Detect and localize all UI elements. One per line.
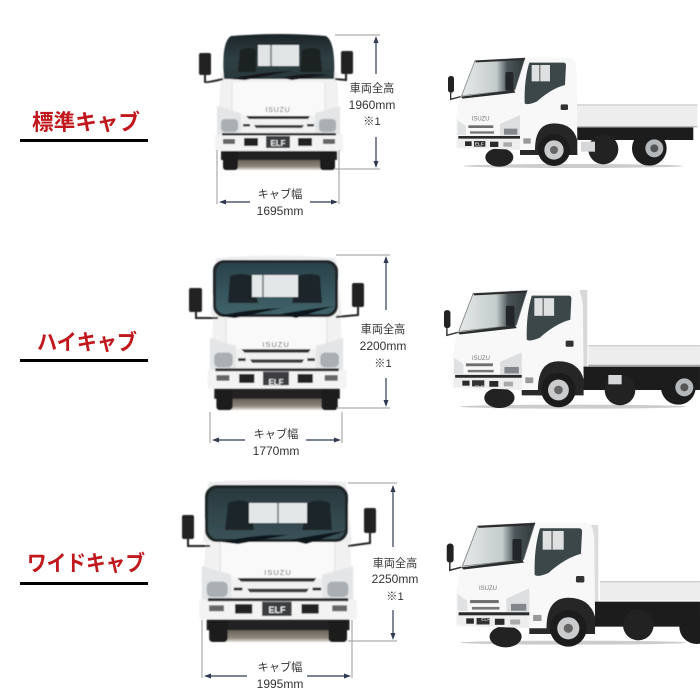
heading: high cab: ハイキャブ bbox=[37, 330, 137, 355]
width dimension: wide cab: 1995mm bbox=[257, 677, 303, 691]
front view truck: wide cab: ISUZU bbox=[264, 568, 292, 577]
height dimension: standard cab bbox=[335, 35, 395, 169]
front view truck: high cab bbox=[189, 256, 364, 410]
height dimension: wide cab: ※1 bbox=[386, 591, 404, 603]
width dimension: standard cab: 1695mm bbox=[257, 204, 303, 218]
height dimension: wide cab: 車両全高 bbox=[373, 556, 417, 570]
width dimension: high cab: 1770mm bbox=[253, 444, 299, 458]
width dimension: standard cab: キャブ幅 bbox=[258, 187, 302, 201]
front view truck: high cab: ELF bbox=[268, 378, 284, 387]
heading: wide cab: ワイドキャブ bbox=[27, 551, 145, 576]
front view truck: standard cab: ISUZU bbox=[266, 107, 290, 114]
height dimension: high cab: 車両全高 bbox=[361, 322, 405, 336]
side view truck: wide cab bbox=[447, 523, 700, 647]
width dimension: wide cab: キャブ幅 bbox=[258, 660, 302, 674]
height dimension: high cab: 2200mm bbox=[360, 339, 406, 353]
heading: standard cab bbox=[20, 110, 148, 142]
side view truck: high cab: ISUZU bbox=[472, 356, 490, 362]
front view truck: standard cab: ELF bbox=[270, 139, 286, 148]
side view truck: standard cab: ISUZU bbox=[472, 116, 490, 122]
side view truck: standard cab bbox=[448, 58, 697, 168]
height dimension: wide cab: 2250mm bbox=[372, 572, 418, 586]
height dimension: high cab bbox=[336, 255, 406, 408]
height dimension: wide cab bbox=[348, 483, 418, 641]
height dimension: standard cab: ※1 bbox=[363, 116, 381, 128]
width dimension: standard cab bbox=[217, 150, 339, 218]
height dimension: standard cab: 1960mm bbox=[349, 98, 395, 112]
heading: wide cab bbox=[20, 551, 148, 585]
heading: high cab bbox=[20, 330, 148, 362]
side view truck: high cab: ELF bbox=[475, 384, 484, 389]
side view truck: wide cab: ELF bbox=[481, 616, 490, 621]
height dimension: standard cab: 車両全高 bbox=[350, 81, 394, 95]
front view truck: wide cab bbox=[182, 480, 376, 642]
heading: standard cab: 標準キャブ bbox=[32, 110, 140, 135]
side view truck: high cab bbox=[444, 290, 700, 409]
side view truck: wide cab: ISUZU bbox=[479, 586, 497, 592]
side view truck: standard cab: ELF bbox=[475, 142, 484, 147]
front view truck: high cab: ISUZU bbox=[262, 340, 290, 349]
front view truck: standard cab bbox=[199, 34, 353, 170]
width dimension: wide cab bbox=[202, 620, 352, 691]
height dimension: high cab: ※1 bbox=[374, 358, 392, 370]
width dimension: high cab bbox=[210, 412, 342, 458]
width dimension: high cab: キャブ幅 bbox=[254, 427, 298, 441]
front view truck: wide cab: ELF bbox=[268, 605, 286, 615]
